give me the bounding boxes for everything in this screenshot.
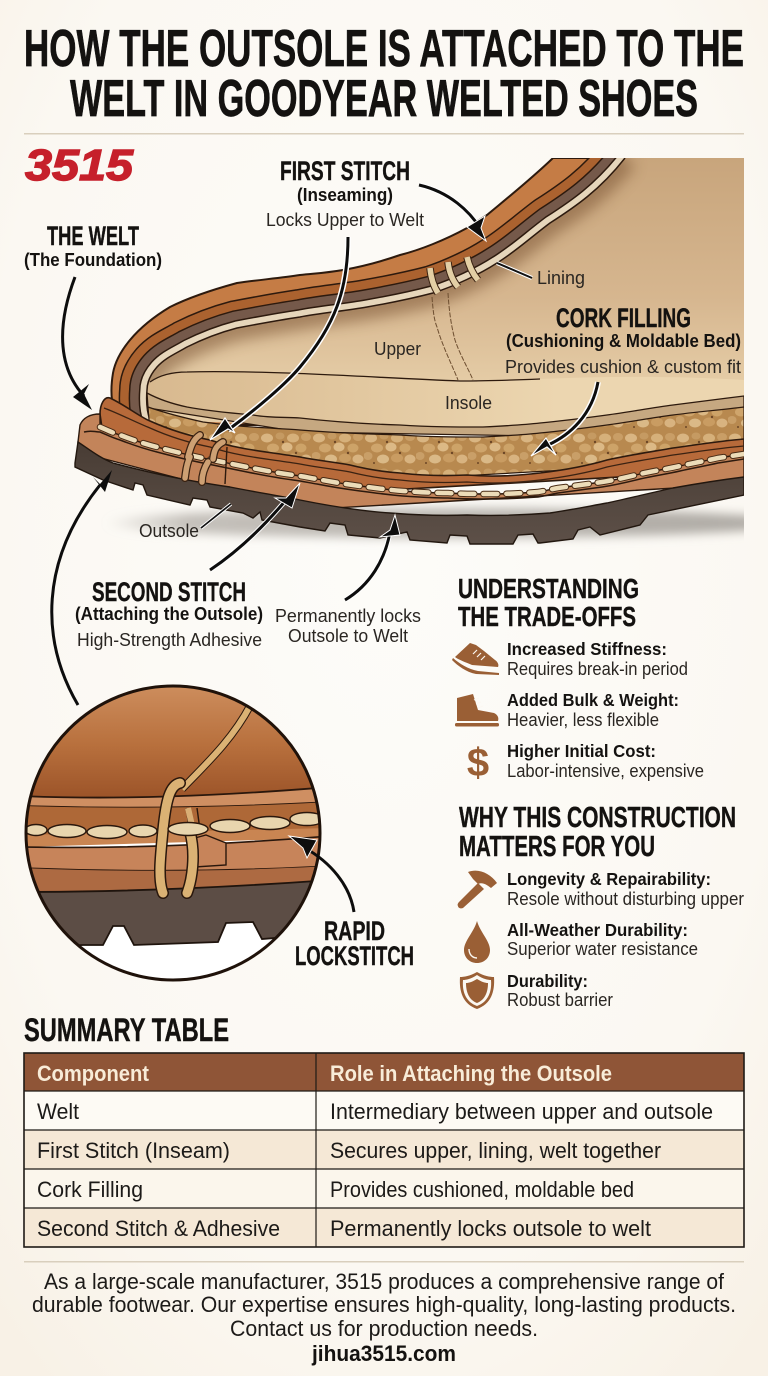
icon: hammer	[458, 871, 497, 908]
text: higher initial cost: Higher Initial Cost:	[507, 741, 656, 761]
arrow: rapid lockstitch	[289, 836, 354, 912]
text: increased stiffness: Requires break-in period	[507, 658, 688, 679]
icon: shield	[460, 972, 494, 1009]
label: cork filling: CORK FILLING	[556, 303, 691, 333]
text: durability: Durability:	[507, 971, 588, 991]
label: second stitch: (Attaching the Outsole)	[75, 604, 263, 624]
logo: 3515: 3515	[25, 141, 134, 190]
arrow: outsole leader	[201, 504, 231, 528]
label: the welt	[24, 221, 162, 270]
heading: understanding the trade-offs	[458, 573, 639, 632]
text: all-weather durability: Superior water resistance	[507, 938, 698, 959]
label: outsole: Outsole	[139, 520, 199, 541]
heading: why this construction matters for you: MATTERS FOR YOU	[459, 831, 655, 863]
label: first stitch: (Inseaming)	[297, 185, 393, 205]
arrow: magnifier to outsole	[52, 470, 112, 705]
arrow: the welt	[63, 277, 92, 410]
text: added bulk and weight: Added Bulk & Weight:	[507, 690, 679, 710]
icon: dollar: $	[467, 741, 489, 785]
label: first stitch: Locks Upper to Welt	[266, 209, 424, 230]
arrow: first stitch to lower stitch	[210, 237, 348, 440]
arrow: lining leader	[497, 263, 532, 278]
label: the welt: (The Foundation)	[24, 250, 162, 270]
label: cork filling: (Cushioning & Moldable Bed)	[506, 331, 741, 351]
text: all-weather durability	[507, 920, 698, 959]
footer text: Contact us for production needs.	[230, 1316, 538, 1341]
summary table: Welt	[37, 1099, 79, 1124]
summary table: First Stitch (Inseam)	[37, 1138, 230, 1163]
summary table: Component	[37, 1061, 150, 1086]
summary table: Cork Filling	[37, 1177, 143, 1202]
text: durability: Robust barrier	[507, 989, 613, 1010]
label: second stitch	[75, 577, 263, 650]
detail circle: rapid lockstitch close-up	[20, 680, 330, 990]
label: rapid lockstitch: LOCKSTITCH	[295, 941, 414, 971]
label: insole: Insole	[445, 392, 492, 413]
arrow: permanently locks	[345, 515, 400, 600]
heading: understanding the trade-offs: UNDERSTANDING	[458, 573, 639, 604]
label: first stitch: FIRST STITCH	[280, 156, 410, 186]
footer text: jihua3515.com	[311, 1341, 456, 1366]
icon: shoe	[452, 643, 499, 675]
title	[24, 20, 744, 128]
label: first stitch	[266, 156, 424, 230]
label: rapid lockstitch: RAPID	[324, 916, 385, 946]
label: cork filling	[505, 303, 741, 377]
label: upper: Upper	[374, 338, 421, 359]
label: permanently locks: Permanently locks	[275, 605, 421, 626]
summary table: Second Stitch & Adhesive	[37, 1216, 280, 1241]
label: permanently locks: Outsole to Welt	[288, 625, 408, 646]
icon: boot	[455, 694, 499, 726]
label: cork filling: Provides cushion & custom fit	[505, 356, 741, 377]
arrow: second stitch	[210, 483, 300, 570]
text: added bulk and weight: Heavier, less flexible	[507, 709, 659, 730]
summary table: Secures upper, lining, welt together	[330, 1138, 661, 1163]
summary table: Provides cushioned, moldable bed	[330, 1177, 634, 1202]
arrow: cork filling	[531, 382, 598, 456]
heading: why this construction matters for you	[459, 802, 736, 863]
summary table: Role in Attaching the Outsole	[330, 1061, 612, 1086]
text: all-weather durability: All-Weather Durability:	[507, 920, 688, 940]
text: higher initial cost	[507, 741, 704, 781]
illustration: shoe cross-section	[75, 158, 768, 544]
text: durability	[507, 971, 613, 1010]
text: added bulk and weight	[507, 690, 679, 730]
summary table: Permanently locks outsole to welt	[330, 1216, 651, 1241]
icon: water drop	[464, 921, 490, 963]
footer text	[32, 1269, 736, 1366]
label: second stitch: High-Strength Adhesive	[77, 629, 262, 650]
heading: understanding the trade-offs: THE TRADE-OFFS	[458, 601, 636, 632]
footer text: As a large-scale manufacturer, 3515 produces a comprehensive range of	[44, 1269, 725, 1294]
label: rapid lockstitch	[295, 916, 414, 971]
label: the welt: THE WELT	[47, 221, 139, 251]
heading: summary table: SUMMARY TABLE	[24, 1012, 229, 1048]
arrow: first stitch to upper seam	[419, 185, 486, 241]
text: increased stiffness: Increased Stiffness:	[507, 639, 667, 659]
text: increased stiffness	[507, 639, 688, 679]
label: lining: Lining	[537, 267, 585, 288]
text: longevity and repairability: Resole without disturbing upper	[507, 888, 744, 909]
footer text: durable footwear. Our expertise ensures high-quality, long-lasting products.	[32, 1292, 736, 1317]
summary table	[24, 1053, 744, 1247]
label: second stitch: SECOND STITCH	[92, 577, 246, 607]
label: permanently locks	[275, 605, 421, 646]
summary table: Intermediary between upper and outsole	[330, 1099, 713, 1124]
text: longevity and repairability	[507, 869, 744, 909]
text: higher initial cost: Labor-intensive, expensive	[507, 760, 704, 781]
text: longevity and repairability: Longevity & Repairability:	[507, 869, 711, 889]
